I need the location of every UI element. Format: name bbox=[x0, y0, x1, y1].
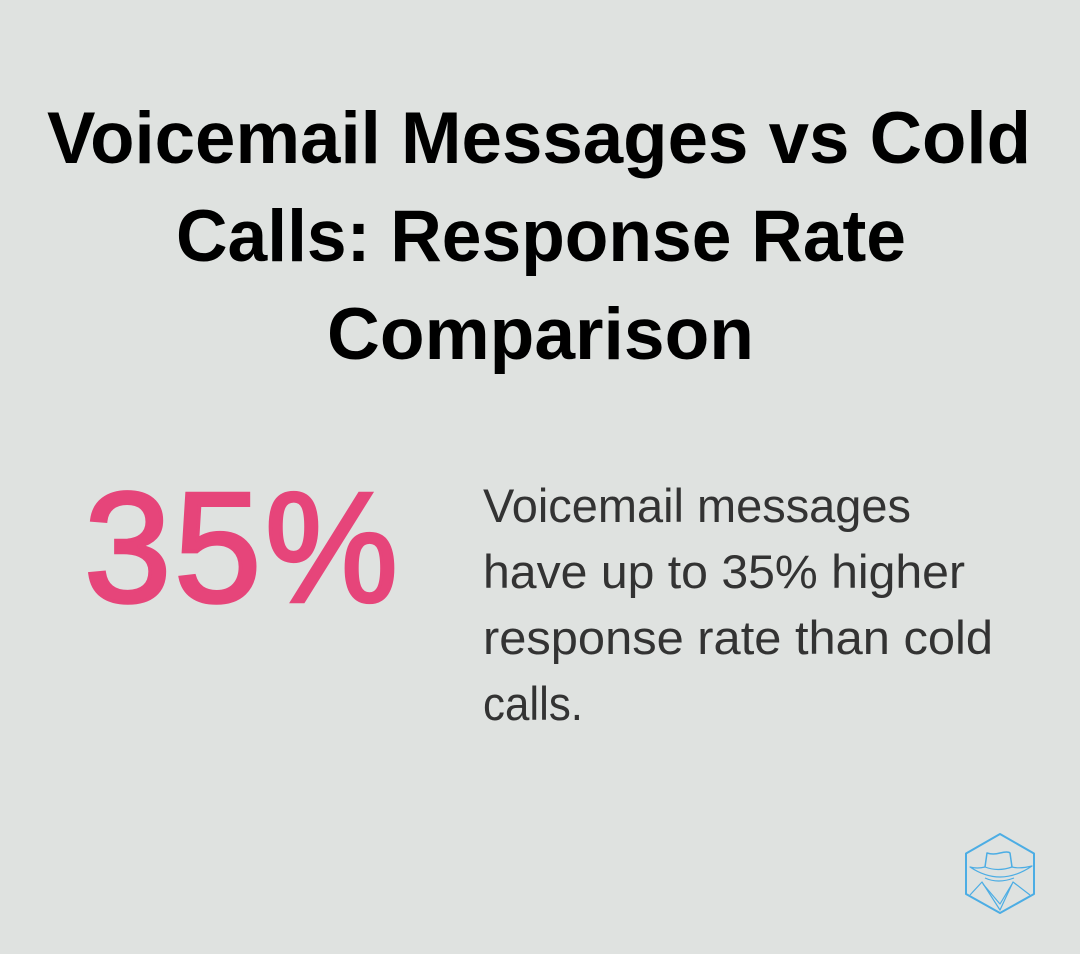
icon: hexagon logo with spy hat bbox=[966, 834, 1034, 913]
big statistic: 35%: % bbox=[265, 460, 398, 636]
title: Comparison bbox=[327, 294, 754, 375]
big statistic: 35% bbox=[84, 460, 398, 636]
description text: Voicemail messages bbox=[483, 480, 911, 533]
description text: response rate than cold bbox=[483, 612, 993, 665]
description text: calls. bbox=[483, 678, 583, 731]
title: Calls: Response Rate bbox=[176, 196, 906, 277]
description text bbox=[483, 480, 993, 731]
title: Voicemail Messages vs Cold bbox=[47, 98, 1031, 179]
description text: have up to 35% higher bbox=[483, 546, 965, 599]
title bbox=[47, 98, 1031, 375]
big statistic: 35%: 35 bbox=[84, 460, 261, 636]
